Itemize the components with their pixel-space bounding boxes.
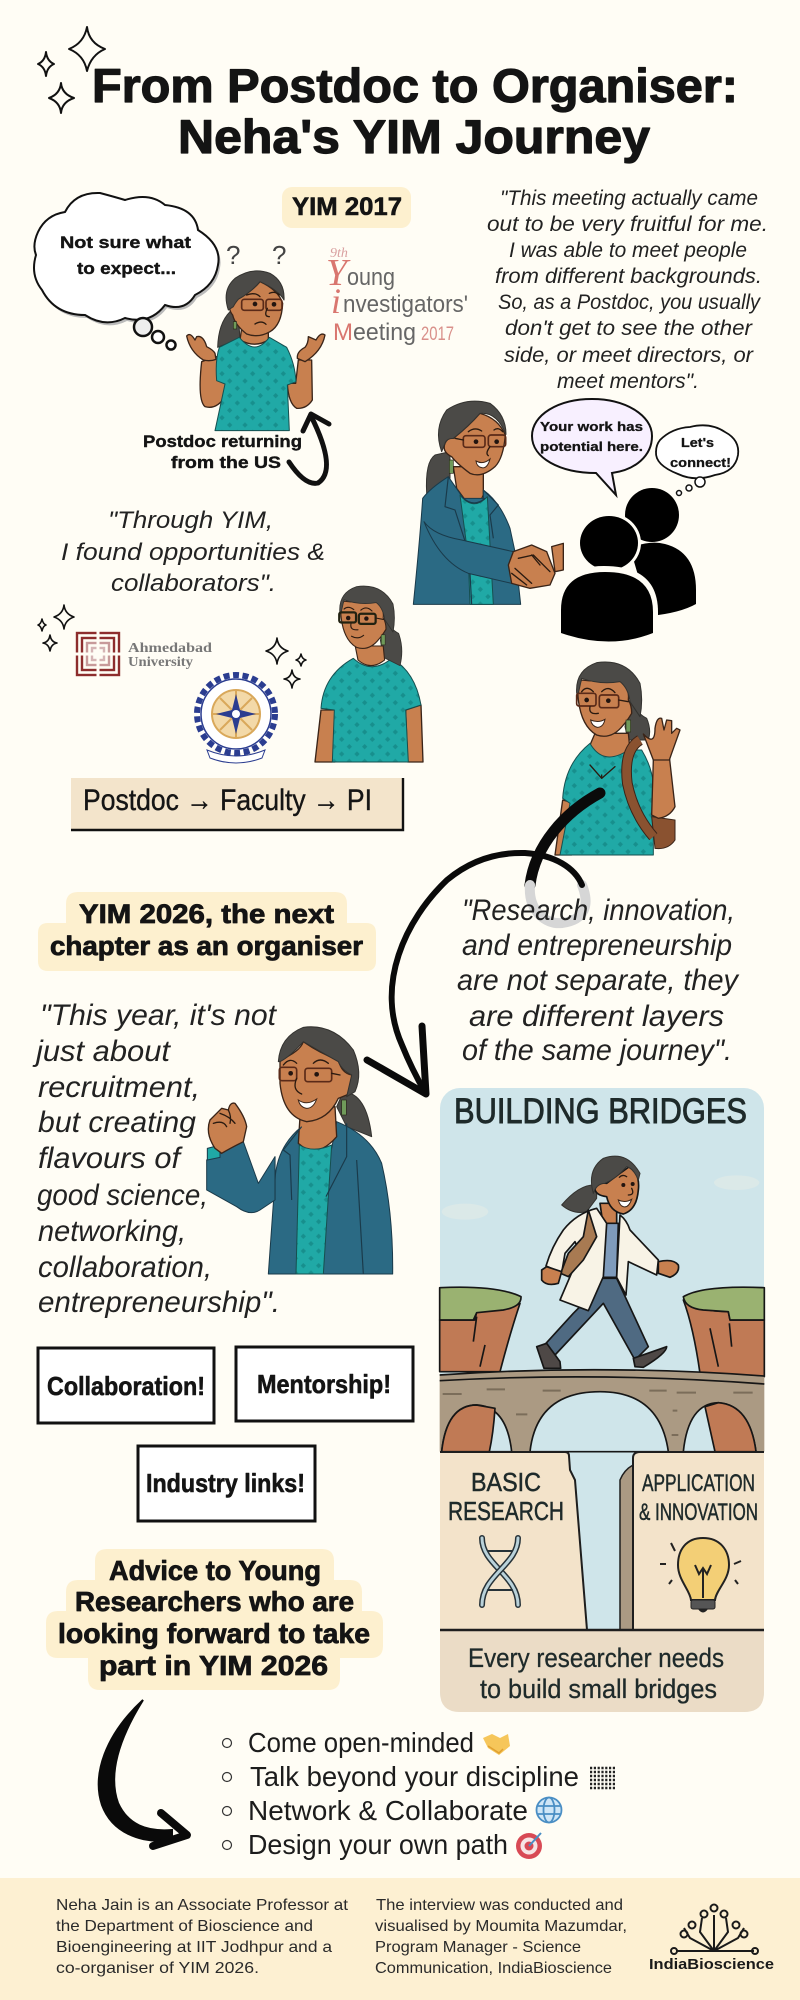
character: handshake [413,401,563,604]
footer: author bio [56,1897,349,1977]
icon: DNA [482,1538,518,1605]
quote: this year: entrepreneurship". [38,1286,280,1319]
caption band: Every researcher needs [468,1643,724,1673]
heading: YIM 2026: chapter as an organiser [50,931,364,961]
caption band [440,1630,764,1712]
logo: IndiaBioscience: IndiaBioscience [649,1956,774,1973]
logo: 9th Young Investigators' Meeting 2017: nvestigators' [343,291,468,318]
footer: credits: Program Manager - Science [375,1939,581,1956]
arrow: long loop to building bridges [367,793,600,1094]
card: basic research [440,1452,587,1630]
icon: title sparkles [38,27,105,113]
title: From Postdoc to Organiser: [92,59,738,112]
quote: through YIM: I found opportunities & [61,539,325,566]
heading: advice: Advice to Young [109,1555,321,1586]
icon: target [516,1833,542,1859]
character: worried postdoc [187,271,325,431]
icon: globe [536,1798,562,1822]
quote: through YIM: collaborators". [111,570,276,597]
title: Neha's YIM Journey [178,110,650,163]
label: Postdoc to Faculty to PI: Postdoc → Faculty → PI [83,784,372,817]
icon: light bulb [660,1538,741,1612]
list: advice items: Network & Collaborate [248,1795,528,1826]
logo: 9th Young Investigators' Meeting 2017: oung [347,264,395,291]
footer band [0,1878,800,2000]
thought bubble: let's connect [656,425,738,496]
logo: 9th Young Investigators' Meeting 2017: M [333,319,353,346]
panel title: BUILDING BRIDGES [454,1092,747,1131]
icon: sparkles left [38,605,74,651]
footer: credits: The interview was conducted and [376,1897,623,1914]
question marks: ? [226,240,240,270]
label: Postdoc to Faculty to PI [71,778,403,830]
quote: research innovation: are not separate, they [457,964,740,997]
quote: through YIM: "Through YIM, [108,507,273,534]
thought bubble: not sure what to expect: to expect... [77,259,176,278]
logo: 9th Young Investigators' Meeting 2017 [326,246,468,346]
quote: research innovation: "Research, innovation, [462,894,735,927]
box: mentorship [236,1347,413,1421]
footer: author bio: co-organiser of YIM 2026. [56,1960,259,1977]
heading: advice: Researchers who are [75,1586,354,1617]
quote: this meeting: meet mentors". [557,370,699,393]
speech bubble: your work has potential here [532,399,652,495]
quote: this meeting: I was able to meet people [509,239,747,262]
quote: this meeting: out to be very fruitful for me. [487,213,768,236]
heading: advice: looking forward to take [58,1618,370,1649]
quote: research innovation [457,894,740,1067]
quote: this meeting: "This meeting actually came [500,187,758,210]
heading: YIM 2026 [38,892,376,971]
list: advice items: Design your own path [248,1829,508,1860]
list: advice items [222,1727,579,1860]
quote: this year: but creating [38,1106,196,1139]
quote: this meeting: from different backgrounds. [495,265,762,288]
character: organiser in blazer [207,1027,393,1274]
quote: this year: networking, [38,1215,186,1248]
title [92,59,738,163]
quote: this meeting: don't get to see the other [505,317,753,340]
logo: IndiaBioscience [649,1904,774,1973]
speech bubble: your work has potential here: Your work has [540,419,643,434]
thought bubble: let's connect: Let's [681,435,714,450]
question marks: ? [272,240,286,270]
question marks [226,240,286,270]
label: postdoc returning from the US [143,432,302,472]
icon: two people silhouettes [556,488,696,645]
box: collaboration: Collaboration! [47,1371,205,1401]
person walking [537,1156,679,1368]
character: smiling in teal shirt [315,586,423,762]
bridge scene [440,1156,764,1452]
icon: handshake emoji [483,1734,510,1755]
card: application and innovation: APPLICATION [642,1470,755,1497]
list: advice items: Talk beyond your discipline [250,1761,579,1792]
quote: research innovation: are different layers [469,1000,724,1033]
logo: IIT Jodhpur seal [197,675,275,763]
left cliff [440,1287,521,1372]
heading: advice [46,1549,383,1690]
logo: Ahmedabad University: University [128,655,193,670]
panel: building bridges [440,1088,764,1712]
speech bubble: your work has potential here: potential here. [540,439,643,454]
bridge [440,1370,764,1452]
box: mentorship: Mentorship! [257,1369,391,1399]
logo: 9th Young Investigators' Meeting 2017: 2017 [421,324,454,345]
quote: this year: collaboration, [38,1251,212,1284]
quote: this year: good science, [37,1179,208,1212]
icon: dot grid [590,1768,615,1788]
thought bubble: not sure what to expect [34,193,221,350]
label: postdoc returning from the US: Postdoc returning [143,432,302,451]
quote: this year: recruitment, [38,1071,200,1104]
heading: advice: part in YIM 2026 [99,1650,328,1681]
card: application and innovation [620,1452,764,1630]
quote: this meeting [487,187,768,393]
heading: YIM 2017 [282,187,411,228]
right cliff [683,1287,764,1377]
logo: 9th Young Investigators' Meeting 2017: Y [326,252,351,294]
quote: this year: flavours of [38,1142,183,1175]
quote: this year [32,999,280,1319]
icon: sparkles right [266,638,306,688]
card: basic research: RESEARCH [448,1496,564,1526]
logo: Ahmedabad University [74,631,212,678]
card: basic research: BASIC [471,1467,541,1497]
footer: credits [375,1897,627,1977]
box: collaboration [38,1348,214,1423]
box: industry links [138,1446,315,1521]
logo: 9th Young Investigators' Meeting 2017: i [331,281,341,321]
heading: YIM 2026: YIM 2026, the next [79,899,334,929]
caption band: to build small bridges [480,1674,717,1704]
list: advice items: Come open-minded [248,1727,474,1758]
footer: credits: visualised by Moumita Mazumdar, [375,1918,627,1935]
footer: author bio: the Department of Bioscience and [56,1918,313,1935]
footer: credits: Communication, IndiaBioscience [375,1960,612,1977]
logo: 9th Young Investigators' Meeting 2017: 9th [330,246,348,261]
footer: author bio: Bioengineering at IIT Jodhpur and a [56,1939,332,1956]
quote: through YIM [61,507,325,597]
logo: Ahmedabad University: Ahmedabad [128,641,212,656]
box: industry links: Industry links! [146,1468,305,1498]
logo: 9th Young Investigators' Meeting 2017: eeting [353,319,416,346]
label: postdoc returning from the US: from the US [171,453,281,472]
quote: this year: "This year, it's not [40,999,278,1032]
footer: author bio: Neha Jain is an Associate Professor at [56,1897,349,1914]
thought bubble: let's connect: connect! [670,455,731,470]
heading: YIM 2017: YIM 2017 [292,193,402,221]
arrow: curved up to character [289,414,329,483]
quote: research innovation: and entrepreneurship [462,929,732,962]
arrow: advice to list [99,1700,187,1846]
thought bubble: not sure what to expect: Not sure what [60,233,191,252]
quote: this year: just about [32,1035,172,1068]
character: waving with bag [555,662,680,855]
quote: this meeting: So, as a Postdoc, you usually [498,291,761,314]
quote: this meeting: side, or meet directors, or [504,344,754,367]
quote: research innovation: of the same journey". [462,1034,732,1067]
